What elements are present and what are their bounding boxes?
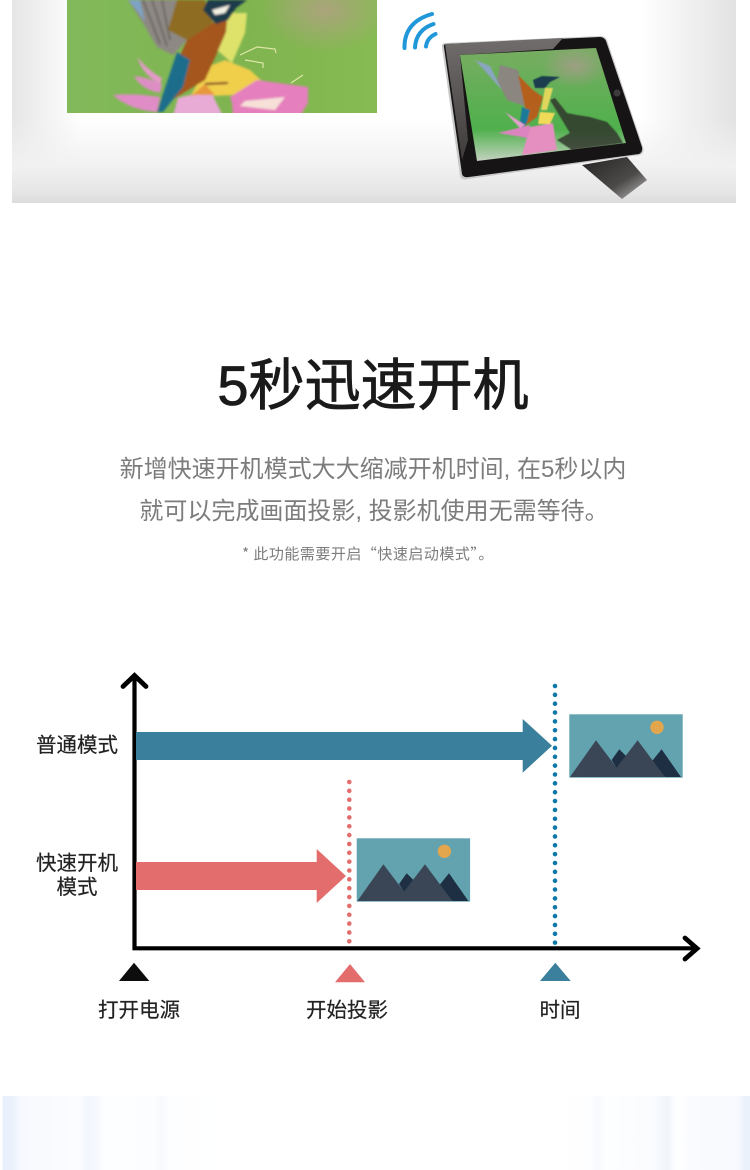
axes — [123, 676, 697, 959]
dotted line: normal mode projection start — [553, 686, 557, 946]
description line 2: 就可以完成画面投影, 投影机使用无需等待。 — [139, 498, 609, 525]
label: fast boot mode: 快速开机 — [36, 852, 118, 875]
label: time: 时间 — [540, 999, 580, 1022]
footnote: * 此功能需要开启“快速启动模式”。 — [242, 543, 494, 564]
dotted line: fast mode projection start — [347, 782, 352, 945]
icon: wifi signal — [404, 14, 436, 48]
arrow: fast mode — [136, 849, 346, 903]
label: start projecting: 开始投影 — [306, 999, 388, 1022]
title: 5秒迅速开机 — [217, 354, 529, 417]
marker: projection start — [335, 964, 365, 982]
label: power on: 打开电源 — [98, 999, 180, 1022]
icon: tablet with hand — [442, 36, 647, 199]
panel: wireless projection scene — [12, 0, 736, 203]
icon: projected picture, fast mode — [357, 838, 470, 902]
photo: kingfisher on lotus — [67, 0, 390, 116]
label: fast boot mode: 模式 — [56, 876, 98, 899]
marker: time — [540, 963, 571, 981]
marker: power on — [119, 963, 149, 981]
label: fast boot mode — [36, 852, 118, 899]
label: normal mode: 普通模式 — [36, 734, 118, 757]
icon: projected picture, normal mode — [569, 714, 683, 778]
chart: startup time comparison — [119, 672, 701, 982]
panel: faded next section image — [0, 1096, 750, 1170]
description line 1: 新增快速开机模式大大缩减开机时间, 在5秒以内 — [120, 456, 626, 483]
arrow: normal mode — [136, 719, 552, 773]
